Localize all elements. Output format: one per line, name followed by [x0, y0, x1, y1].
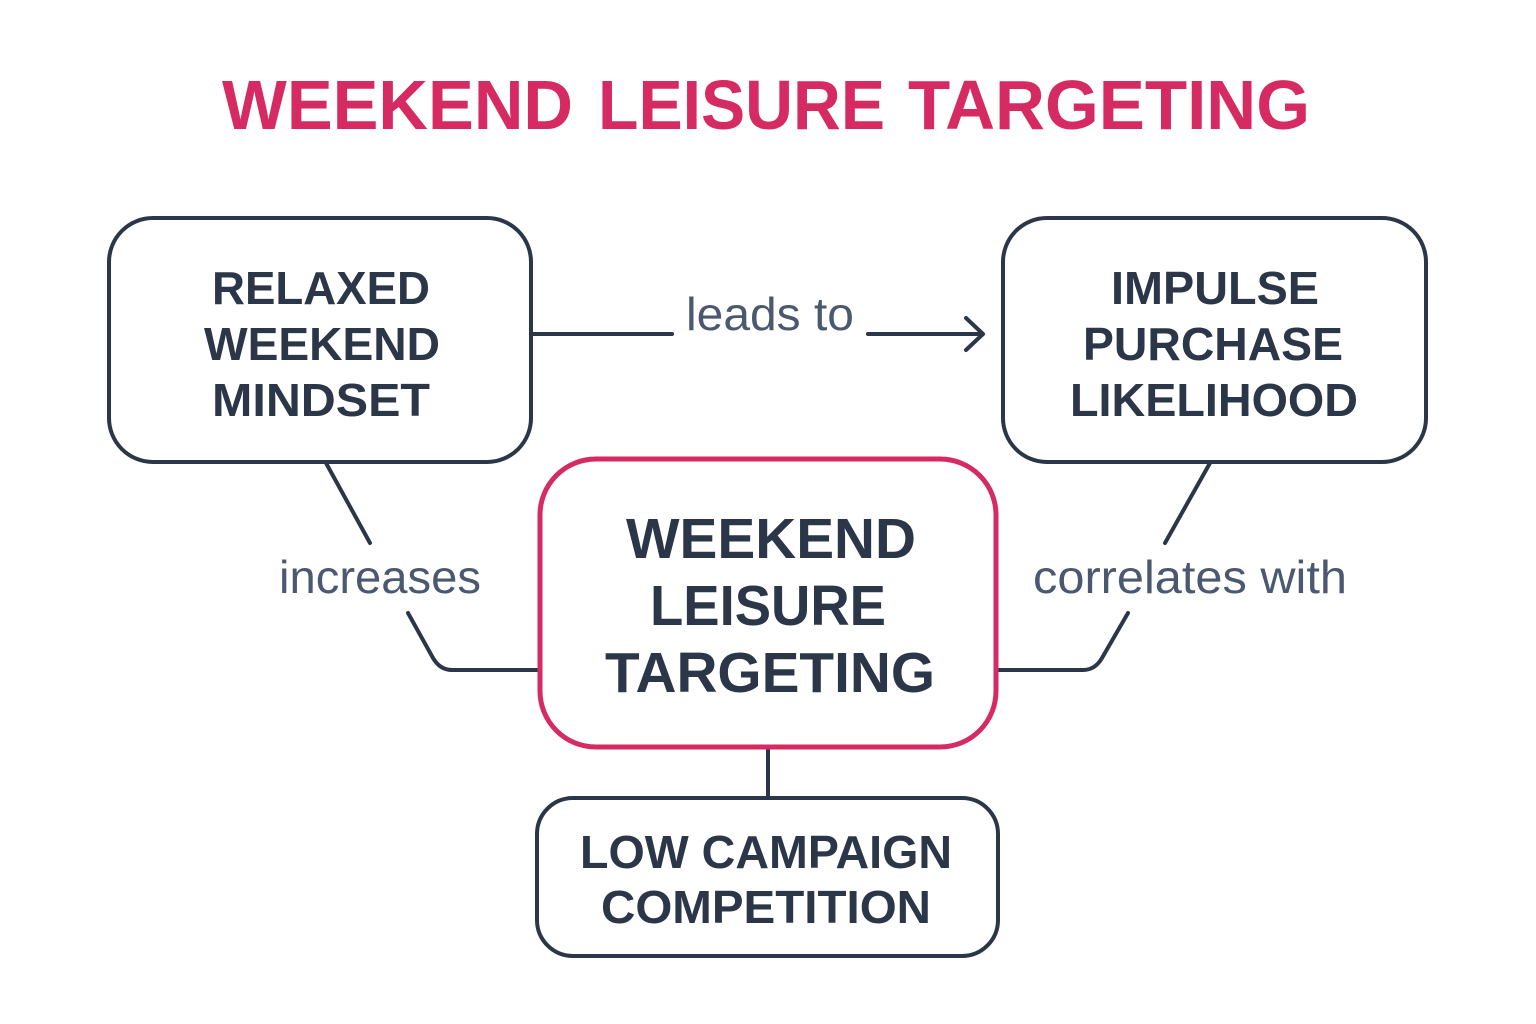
panel: impulse purchase likelihood: IMPULSE [1111, 262, 1319, 314]
panel: weekend leisure targeting (center): WEEKEND [626, 507, 916, 571]
panel: low campaign competition [537, 798, 998, 956]
panel: weekend leisure targeting (center) [540, 459, 996, 747]
panel: relaxed weekend mindset: WEEKEND [204, 318, 440, 370]
panel: relaxed weekend mindset [109, 218, 531, 462]
title [222, 66, 1310, 144]
panel: relaxed weekend mindset: MINDSET [212, 374, 430, 426]
label: increases: increases [279, 551, 481, 603]
connector: center to low campaign competition [766, 748, 770, 798]
panel: relaxed weekend mindset: RELAXED [212, 262, 430, 314]
panel: impulse purchase likelihood [1003, 218, 1426, 462]
panel: low campaign competition: LOW CAMPAIGN [580, 826, 952, 878]
panel: weekend leisure targeting (center): LEISURE [650, 574, 886, 638]
label: correlates with: correlates with [1033, 551, 1347, 603]
arrow: relaxed mindset leads to impulse purchase [532, 318, 983, 350]
connector: impulse purchase to weekend leisure targeting [997, 463, 1210, 670]
label: leads to: leads to [686, 288, 854, 340]
panel: impulse purchase likelihood: PURCHASE [1083, 318, 1343, 370]
connector: relaxed mindset to weekend leisure targeting [326, 463, 540, 670]
panel: weekend leisure targeting (center): TARGETING [605, 641, 935, 705]
title: TARGETING [908, 66, 1310, 144]
title: WEEKEND [222, 66, 573, 144]
panel: low campaign competition: COMPETITION [601, 881, 931, 933]
title: LEISURE [598, 66, 885, 144]
panel: impulse purchase likelihood: LIKELIHOOD [1070, 374, 1358, 426]
